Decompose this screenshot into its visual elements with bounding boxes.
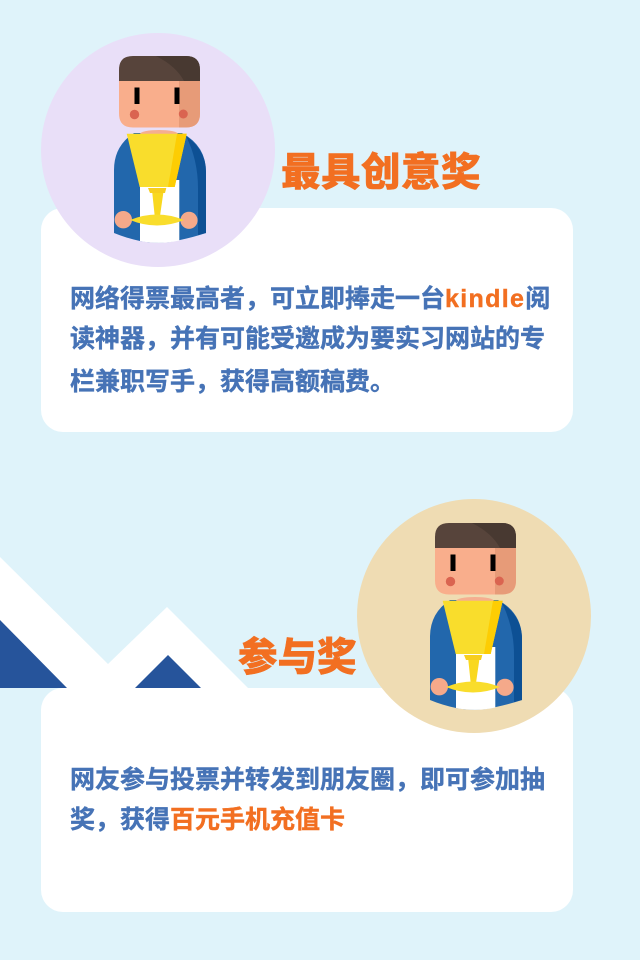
panel: participation award card	[41, 688, 573, 912]
text block: creative award description: 栏兼职写手，获得高额稿费。	[70, 368, 395, 396]
panel: creative award card	[41, 208, 573, 432]
text block: creative award description: 网络得票最高者，可立即捧走一台kindle阅	[70, 285, 550, 313]
text block: participation award description: 网友参与投票并转发到朋友圈，即可参加抽	[70, 766, 545, 794]
icon: lavender circle with trophy figure	[41, 33, 275, 267]
heading: creative award: 最具创意奖	[281, 141, 481, 198]
text block: creative award description: 读神器，并有可能受邀成为要实习网站的专	[70, 325, 545, 353]
icon: tan circle with trophy figure	[357, 499, 591, 733]
text block: participation award description	[70, 766, 545, 834]
text block: creative award description	[70, 284, 550, 396]
text block: participation award description: 奖，获得百元手机充值卡	[70, 806, 345, 834]
heading: participation award: 参与奖	[238, 626, 356, 683]
